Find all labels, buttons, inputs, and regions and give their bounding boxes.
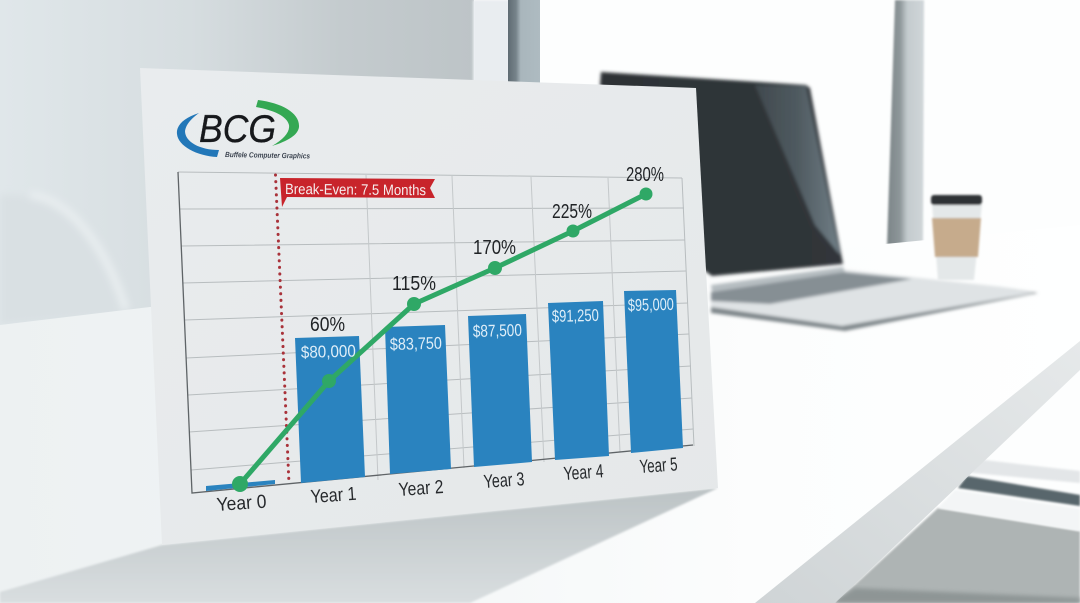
- logo green swoosh: [256, 100, 299, 146]
- card shadow on desk: [0, 488, 718, 603]
- bar: year 0: [206, 480, 275, 491]
- bar value labels: $83,750: [390, 334, 442, 354]
- background chair: [0, 195, 128, 325]
- axis year labels: Year 5: [639, 454, 678, 478]
- break-even flag: Break-Even: 7.5 Months: [285, 181, 426, 199]
- bar: year 5: [624, 290, 683, 453]
- laptop: [600, 72, 1038, 331]
- chart axes: [178, 172, 693, 493]
- percent labels: 115%: [392, 273, 436, 295]
- logo tagline: Buffele Computer Graphics: [225, 150, 310, 160]
- bar: year 1: [295, 336, 365, 483]
- growth line: [232, 188, 652, 492]
- coffee cup: [931, 195, 982, 280]
- bar value labels: [301, 295, 674, 362]
- logo: BCG: [177, 100, 310, 160]
- break-even dotted line: [276, 175, 289, 484]
- percent labels: 60%: [310, 314, 345, 336]
- bar: year 2: [385, 325, 451, 474]
- floor and lower-right structure: [755, 341, 1080, 603]
- chart gridlines: [178, 172, 694, 480]
- bar value labels: $80,000: [301, 342, 356, 362]
- bars: [206, 290, 683, 491]
- bar: year 4: [548, 301, 609, 460]
- bar value labels: $87,500: [473, 321, 522, 341]
- axis year labels: Year 3: [483, 469, 525, 493]
- break-even flag: [280, 178, 435, 207]
- laptop screen: [600, 72, 843, 276]
- axis year labels: Year 1: [310, 484, 357, 508]
- bar value labels: $91,250: [552, 306, 599, 326]
- panel: chart card: [140, 68, 718, 545]
- axis year labels: [216, 454, 678, 516]
- percent labels: 280%: [626, 164, 664, 186]
- desk edge strip: [755, 341, 1080, 603]
- axis year labels: Year 4: [563, 461, 605, 485]
- bar value labels: $95,000: [628, 295, 674, 315]
- desk: [0, 225, 1080, 603]
- axis year labels: Year 0: [216, 492, 267, 516]
- bar: year 3: [468, 314, 532, 467]
- logo blue swoosh: [177, 113, 219, 157]
- percent labels: 225%: [552, 201, 592, 223]
- laptop base: [711, 267, 1038, 331]
- axis year labels: Year 2: [398, 477, 444, 501]
- logo letters: BCG: [199, 108, 276, 151]
- percent labels: 170%: [473, 237, 516, 259]
- percent labels: [310, 164, 664, 336]
